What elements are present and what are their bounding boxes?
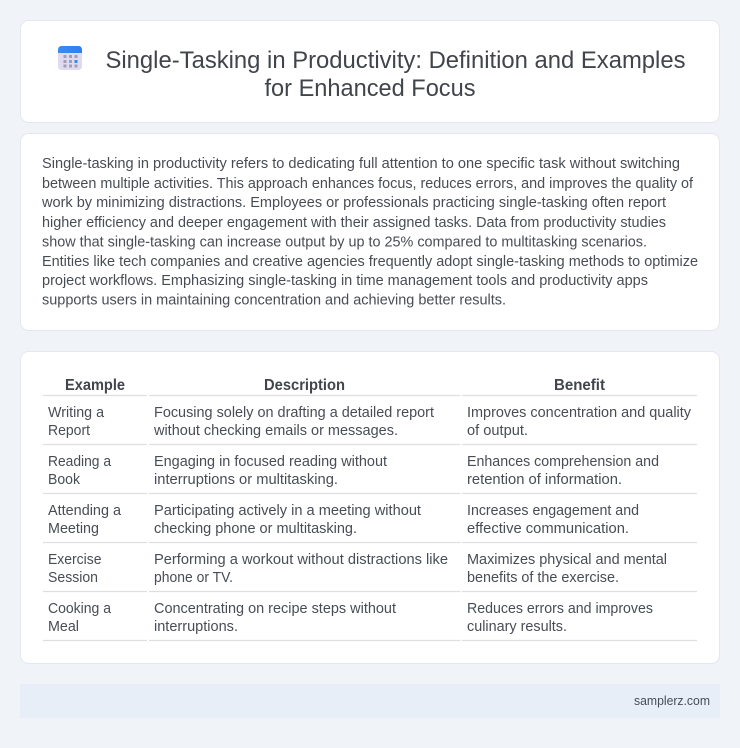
title: for Enhanced Focus bbox=[264, 75, 476, 102]
table row: cooking a meal: Cooking a bbox=[48, 601, 111, 617]
table row: reading a book: Reading a bbox=[48, 454, 111, 470]
text block: definition: supports users in maintaining concentration and achieving better results. bbox=[42, 292, 506, 308]
table row: writing a report: Writing a bbox=[48, 405, 104, 421]
text block: definition: show that single-tasking can increase output by up to 25% compared to multitasking scenarios. bbox=[42, 234, 647, 250]
table header: Description bbox=[264, 377, 345, 394]
table row: writing a report: Focusing solely on drafting a detailed report bbox=[154, 405, 434, 421]
table row: attending a meeting: Participating actively in a meeting without bbox=[154, 503, 421, 519]
table row: writing a report: Improves concentration and quality bbox=[467, 405, 692, 421]
table row: reading a book bbox=[48, 454, 659, 488]
table row: attending a meeting: Attending a bbox=[48, 503, 121, 519]
table header: Benefit bbox=[554, 377, 606, 394]
table row: exercise session: Session bbox=[48, 570, 98, 586]
table row: writing a report bbox=[48, 405, 692, 439]
table header bbox=[65, 377, 606, 394]
table row: cooking a meal bbox=[48, 601, 653, 635]
text block: definition: between multiple activities. This approach enhances focus, reduces errors, and improves the quality of bbox=[42, 176, 694, 192]
text block: definition: Single-tasking in productivity refers to dedicating full attention to one specific task without switching bbox=[42, 156, 680, 172]
table row: cooking a meal: Concentrating on recipe steps without bbox=[154, 601, 396, 617]
panel: examples table bbox=[20, 352, 720, 664]
table row: cooking a meal: culinary results. bbox=[467, 619, 567, 635]
table row: exercise session: Exercise bbox=[48, 552, 102, 568]
text block: definition: Entities like tech companies and creative agencies frequently adopt single-tasking methods to optimize bbox=[42, 254, 698, 270]
table row: cooking a meal: Meal bbox=[48, 619, 79, 635]
table row: writing a report: of output. bbox=[467, 423, 528, 439]
table row: writing a report: Report bbox=[48, 423, 90, 439]
table row: attending a meeting: Meeting bbox=[48, 521, 99, 537]
table row: attending a meeting: Increases engagement and bbox=[467, 503, 639, 519]
table row: exercise session: Performing a workout without distractions like bbox=[154, 552, 448, 568]
text block: definition: project workflows. Emphasizing single-tasking in time management tools and productivity apps bbox=[42, 273, 648, 289]
panel: title card bbox=[20, 20, 720, 122]
table row: writing a report: without checking emails or messages. bbox=[153, 423, 398, 439]
table row: exercise session bbox=[48, 552, 667, 586]
title bbox=[106, 47, 686, 102]
footer source: samplerz.com bbox=[634, 693, 710, 708]
text block: definition: higher efficiency and deeper engagement with their assigned tasks. Data from productivity studies bbox=[42, 215, 666, 231]
text block: definition bbox=[41, 156, 698, 308]
table row: attending a meeting: effective communication. bbox=[467, 521, 629, 537]
text block: definition: work by minimizing distractions. Employees or professionals practicing single-tasking often report bbox=[41, 195, 666, 211]
table row: reading a book: retention of information. bbox=[467, 472, 622, 488]
table header: Example bbox=[65, 377, 125, 394]
table row: reading a book: Engaging in focused reading without bbox=[154, 454, 387, 470]
table row: exercise session: phone or TV. bbox=[154, 570, 233, 586]
table row: cooking a meal: interruptions. bbox=[154, 619, 238, 635]
table row: reading a book: Enhances comprehension and bbox=[467, 454, 659, 470]
table row: exercise session: Maximizes physical and mental bbox=[467, 552, 667, 568]
icon: calendar bbox=[58, 46, 82, 70]
panel: definition text bbox=[20, 134, 720, 330]
table row: attending a meeting: checking phone or multitasking. bbox=[154, 521, 357, 537]
table row: exercise session: benefits of the exercise. bbox=[467, 570, 619, 586]
table row: reading a book: Book bbox=[48, 472, 81, 488]
table row: attending a meeting bbox=[48, 503, 639, 537]
table row: reading a book: interruptions or multitasking. bbox=[154, 472, 338, 488]
footer bar bbox=[20, 684, 720, 718]
table row: cooking a meal: Reduces errors and improves bbox=[467, 601, 653, 617]
title: Single-Tasking in Productivity: Definition and Examples bbox=[106, 47, 686, 74]
